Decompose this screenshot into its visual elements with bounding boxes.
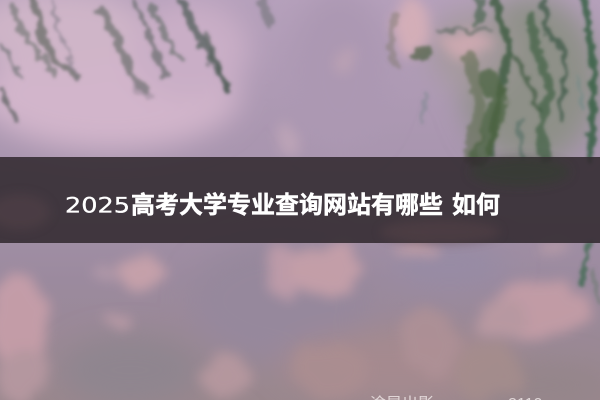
willow branches top right xyxy=(390,0,598,300)
dark title banner xyxy=(0,157,600,244)
clipped watermark at bottom edge xyxy=(370,395,543,400)
title text: 如何 xyxy=(452,192,500,219)
willow branches top left xyxy=(0,0,270,122)
title text: 2025 xyxy=(65,194,130,218)
title text: 高考大学专业查询网站有哪些 xyxy=(131,192,443,219)
